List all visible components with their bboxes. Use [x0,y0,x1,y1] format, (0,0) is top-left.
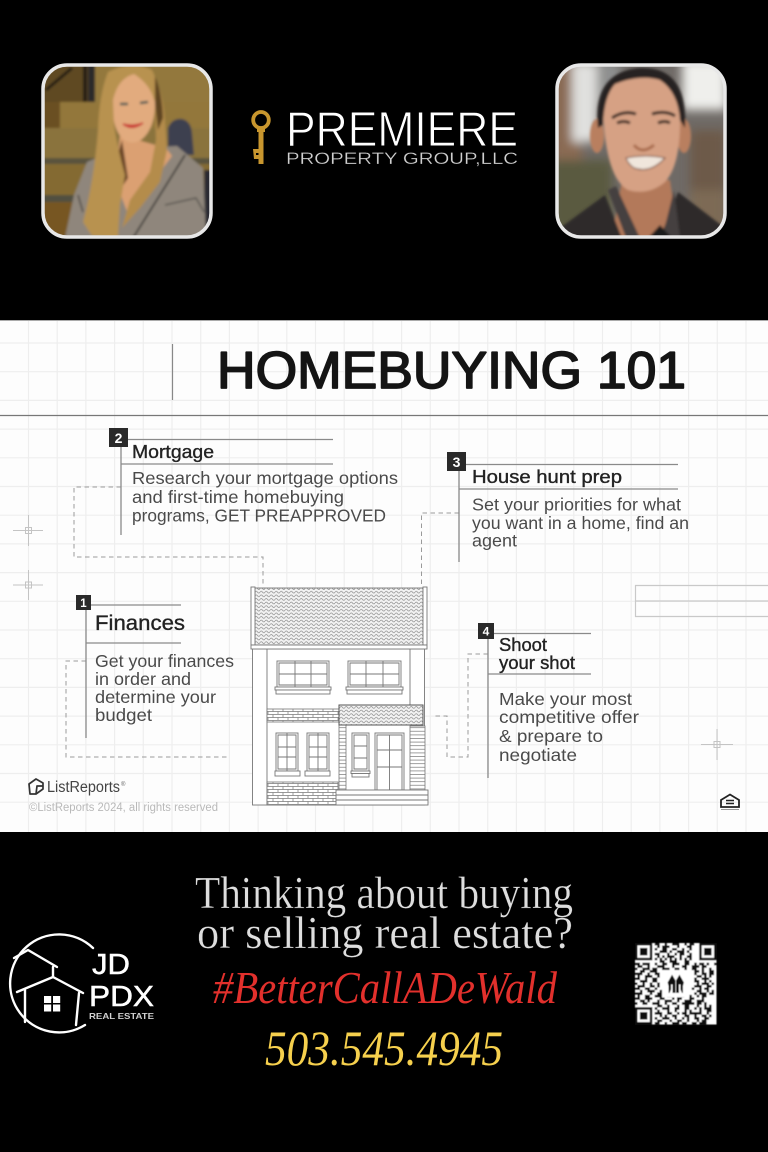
logo: ListReports: ® [121,781,126,788]
step 1: finances: determine your [95,687,216,707]
step 2: mortgage: 2 [115,430,123,446]
upper right window [346,661,403,694]
step 2: mortgage [74,428,398,584]
step 2: mortgage: Mortgage [132,442,214,462]
logo: JD PDX Real Estate: PDX [89,981,154,1013]
step 3: house hunt prep: you want in a home, find an [472,513,689,533]
step 4: shoot your shot: your shot [499,653,575,673]
photo: man agent portrait [552,60,730,240]
step 4: shoot your shot: & prepare to [499,726,603,746]
step 3: house hunt prep: agent [472,530,517,550]
photo frame: man [557,65,725,237]
call to action text: #BetterCallADeWald [213,962,558,1013]
logo: ListReports [29,779,218,814]
icon: gold key [253,112,269,164]
icon: window [44,996,60,1012]
step 2: mortgage: and first-time homebuying [132,487,344,507]
icon: circle and houses [10,934,93,1032]
icon: equal housing [721,794,739,810]
step 4: shoot your shot: 4 [483,624,490,638]
call to action text: 503.545.4945 [265,1020,503,1076]
call to action text: Thinking about buying [195,867,573,918]
step 4: shoot your shot: negotiate [499,745,577,765]
step 4: shoot your shot: Shoot [499,635,547,655]
photo: woman agent portrait [40,60,215,240]
step 4: shoot your shot [432,623,639,778]
step 2: mortgage: Research your mortgage options [132,468,398,488]
step 4: shoot your shot: Make your most [499,689,632,709]
step 4: shoot your shot: competitive offer [499,707,639,727]
logo: Premiere Property Group: PROPERTY GROUP,LLC [286,150,518,168]
step 1: finances: Finances [95,612,185,635]
decoration: crosshair marks [13,515,768,760]
front door [375,733,404,790]
house illustration [251,587,428,805]
finder patterns [636,944,715,1023]
step 3: house hunt prep: Set your priorities for what [472,494,681,514]
roof [251,587,427,649]
logo: JD PDX Real Estate: JD [92,949,130,981]
step 3: house hunt prep [422,452,689,586]
logo: Premiere Property Group: PREMIERE [286,102,518,157]
panel: homebuying 101 blueprint [0,320,768,832]
brick band [267,709,339,722]
heading: Homebuying 101: HOMEBUYING 101 [217,342,686,400]
logo: Premiere Property Group [253,102,518,168]
step 1: finances: 1 [80,598,87,610]
call to action text: or selling real estate? [197,907,573,958]
logo: JD PDX Real Estate [10,934,154,1032]
QR code [635,943,717,1025]
step 2: mortgage: programs, GET PREAPPROVED [132,506,386,526]
step 3: house hunt prep: House hunt prep [472,467,622,487]
step 1: finances: budget [95,705,152,725]
step 1: finances: in order and [95,669,191,689]
logo: ListReports: ListReports [47,779,120,796]
logo: JD PDX Real Estate: REAL ESTATE [89,1011,154,1021]
porch [339,705,425,790]
logo: ListReports: ©ListReports 2024, all rights reserved [29,802,218,814]
lower windows [275,733,370,777]
call to action text [195,867,573,1076]
brick base and steps [267,782,428,805]
photo frame: woman [43,65,211,237]
upper left window [275,661,331,694]
step 1: finances: Get your finances [95,651,234,671]
QR centre logo [662,970,689,997]
icon: ListReports mark [29,779,43,794]
step 1: finances [66,595,234,757]
step 3: house hunt prep: 3 [453,454,461,470]
